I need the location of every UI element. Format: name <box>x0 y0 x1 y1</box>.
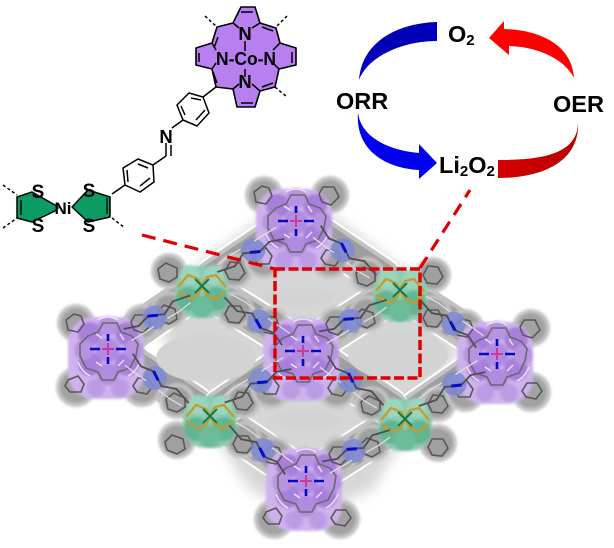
chemical structure: monomer unit <box>3 7 296 237</box>
Ni dithiolene: Ni <box>54 199 72 218</box>
label: ORR: ORR <box>336 88 388 114</box>
Co porphyrin nodes <box>56 176 551 539</box>
Ni dithiolene: S <box>32 216 44 237</box>
porphyrin ring: N-Co-N <box>216 48 276 69</box>
label: O2: O <box>448 21 466 47</box>
linker arm bases <box>95 201 514 499</box>
label: Li2O2: 2 <box>487 163 495 180</box>
pores <box>156 288 448 429</box>
label: Li2O2: Li <box>439 152 460 178</box>
linker with imine: N <box>159 126 173 147</box>
arrow: blue ORR to Li2O2 <box>358 112 437 179</box>
arrow: dark red lower arc <box>498 122 578 178</box>
zoom callout: dashed box and guide lines <box>142 190 470 378</box>
label: Li2O2: 2 <box>460 163 468 180</box>
label: Li2O2: O <box>468 152 487 178</box>
porphyrin ring: N <box>238 23 252 44</box>
linker imine details <box>121 222 488 478</box>
label: OER: OER <box>553 91 604 117</box>
porphyrin ring <box>196 7 296 107</box>
arrow: blue upper arc <box>359 22 437 80</box>
Ni dithiolene: S <box>83 181 95 202</box>
Ni dithiolene: S <box>32 182 44 203</box>
Ni nodes <box>150 253 457 462</box>
porphyrin ring: N <box>238 71 252 92</box>
linker with imine <box>112 87 216 194</box>
Ni dithiolene: S <box>83 216 95 237</box>
reaction cycle <box>336 21 604 180</box>
label: O2: 2 <box>466 32 475 49</box>
arrow: red OER to O2 <box>489 21 574 78</box>
Ni dithiolene <box>3 181 125 237</box>
gray halo behind framework <box>160 195 460 515</box>
3D framework model <box>56 176 551 539</box>
